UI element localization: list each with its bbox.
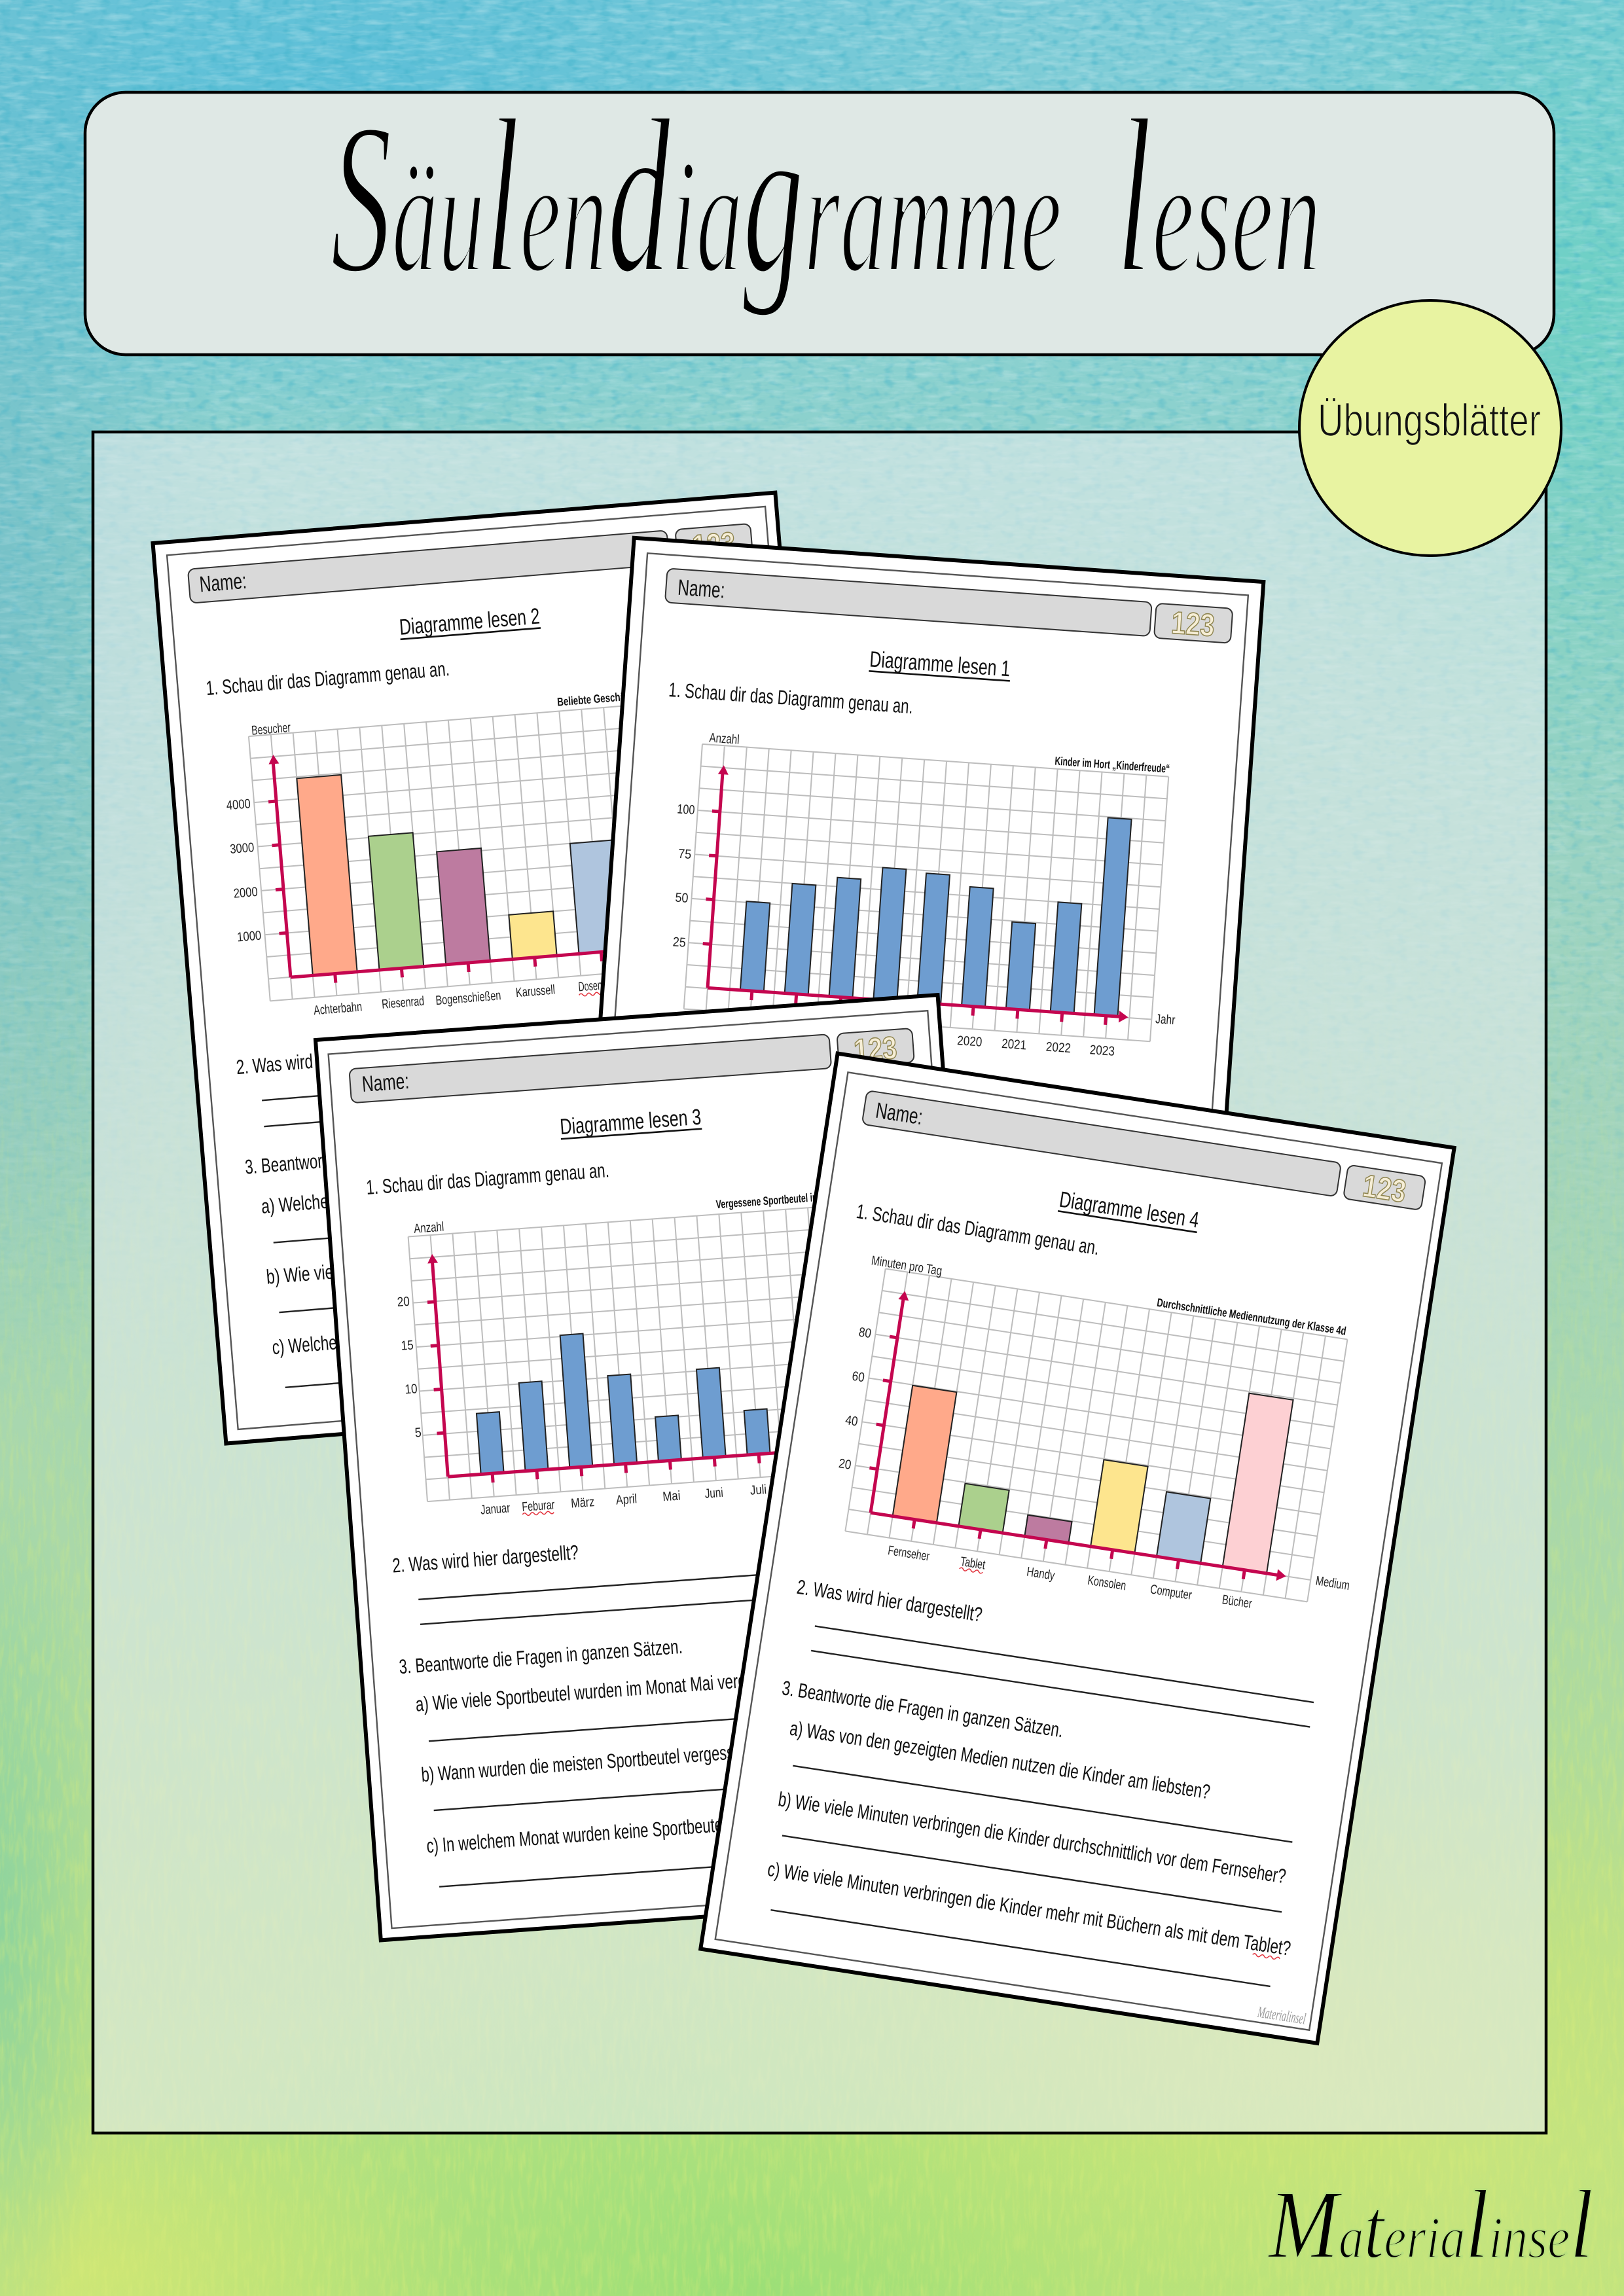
bar chart: Vergessene Sportbeutel: Mai (662, 1489, 681, 1504)
title: lesen (1116, 73, 1321, 319)
tasks 2 and 3: a) Wie viele Sportbeutel wurden im Monat Mai vergessen? (415, 1666, 794, 1716)
sheet heading (1058, 1187, 1200, 1233)
score box: 123 (1170, 605, 1216, 643)
title: Säulendiagramme (331, 73, 1062, 319)
bar chart: Kinder im Hort: 2017 (825, 1024, 851, 1041)
score box: 123 (852, 1031, 898, 1068)
tasks 2 and 3: b) Wann wurden die meisten Sportbeutel vergessen? (420, 1739, 759, 1786)
bar chart: Vergessene Sportbeutel: Juli (749, 1482, 767, 1498)
bar chart: Kinder im Hort: 2019 (914, 1031, 939, 1047)
brand: Materialinsel: Materialinsel (1267, 2170, 1593, 2279)
tasks 2 and 3: 2. Was wird hier dargestellt? (795, 1575, 984, 1626)
bar chart: Mediennutzung: 40 (844, 1413, 859, 1429)
sheet paper (700, 1054, 1454, 2043)
tasks 2 and 3 (748, 1575, 1335, 1988)
bar chart: Beliebte Geschäfte: 2000 (233, 885, 259, 901)
score box: 123 (1360, 1169, 1408, 1210)
name bar: Name: (361, 1069, 410, 1097)
bar chart: Vergessene Sportbeutel (391, 1187, 895, 1524)
sheet heading: Diagramme lesen 4 (1058, 1187, 1200, 1233)
worksheet: Diagramme lesen 3 (316, 995, 1003, 1940)
bar chart: Kinder im Hort: Kinder im Hort „Kinderfreude“ (1055, 754, 1170, 776)
task 1: 1. Schau dir das Diagramm genau an. (205, 657, 450, 700)
sheet heading: Diagramme lesen 1 (869, 647, 1011, 681)
bar chart: Kinder im Hort: Anzahl (709, 731, 740, 747)
bar chart: Mediennutzung: 80 (857, 1325, 873, 1341)
task 1: 1. Schau dir das Diagramm genau an. (365, 1158, 610, 1199)
bar chart: Vergessene Sportbeutel: 20 (397, 1295, 410, 1310)
sheet heading (399, 604, 541, 640)
bar chart: Mediennutzung: Handy (1026, 1565, 1056, 1583)
badge: Übungsblätter (1299, 300, 1561, 556)
worksheet: Diagramme lesen 2 (153, 493, 848, 1443)
name bar (862, 1090, 1341, 1196)
bar chart: Beliebte Geschäfte: 3000 (229, 840, 255, 857)
bar chart: Beliebte Geschäfte: Beliebte Geschäfte auf dem Rummel (556, 683, 709, 709)
score box: 123 (691, 526, 737, 564)
sheet heading: Diagramme lesen 2 (399, 604, 541, 640)
name bar (349, 1034, 831, 1103)
name bar: Name: (677, 575, 726, 603)
bar chart: Kinder im Hort: 2022 (1045, 1040, 1072, 1056)
bar chart: Mediennutzung (825, 1252, 1388, 1628)
tasks 2 and 3: 3. Beantworte die Fragen in ganzen Sätzen. (780, 1676, 1065, 1742)
sheet paper (571, 538, 1263, 1483)
tasks 2 and 3: 2. Was wird hier dargestellt? (391, 1541, 579, 1577)
bar chart: Vergessene Sportbeutel: April (615, 1492, 638, 1508)
tasks 2 and 3 (391, 1516, 943, 1888)
bar chart: Kinder im Hort: 2018 (870, 1028, 895, 1043)
worksheet: Diagramme lesen 4 (700, 1054, 1454, 2043)
bar chart: Beliebte Geschäfte: 4000 (226, 797, 251, 813)
bar chart: Mediennutzung: Bücher (1221, 1592, 1254, 1611)
sheet paper (153, 493, 848, 1443)
bar chart: Kinder im Hort: 2015 (736, 1018, 763, 1034)
watermark: Materialinsel (1256, 2004, 1307, 2028)
tasks 2 and 3: c) In welchem Monat wurden keine Sportbeutel vergessen? (425, 1807, 804, 1857)
bar chart: Beliebte Geschäfte (220, 683, 738, 1024)
bar chart: Mediennutzung: 20 (838, 1456, 852, 1473)
bar chart: Mediennutzung: Tablet (960, 1554, 986, 1573)
bar chart: Vergessene Sportbeutel: Anzahl (414, 1220, 444, 1236)
bar chart: Vergessene Sportbeutel: Feburar (522, 1498, 555, 1515)
bar chart: Beliebte Geschäfte: Achterbahn (313, 999, 363, 1018)
bar chart: Kinder im Hort: 2023 (1089, 1043, 1115, 1059)
bar chart: Vergessene Sportbeutel: Juni (704, 1486, 723, 1501)
name bar (188, 530, 670, 603)
tasks 2 and 3: 3. Beantworte die Fragen in ganzen Sätzen. (244, 1133, 529, 1179)
bar chart: Beliebte Geschäfte: Karussell (515, 982, 556, 1000)
score box (1154, 603, 1233, 645)
bar chart: Vergessene Sportbeutel: 10 (405, 1382, 418, 1397)
bar chart: Beliebte Geschäfte: Riesenrad (381, 994, 425, 1012)
worksheet: Diagramme lesen 1 (571, 538, 1263, 1483)
tasks 2 and 3 (235, 1013, 788, 1390)
bar chart: Kinder im Hort: 2016 (781, 1021, 807, 1037)
bar chart: Kinder im Hort: 25 (672, 935, 686, 950)
bar chart: Mediennutzung: 60 (851, 1369, 865, 1385)
tasks 2 and 3: a) Welches Geschäft hatte die meisten Besucher? (261, 1168, 595, 1218)
sheet heading: Diagramme lesen 3 (559, 1105, 702, 1139)
bar chart: Kinder im Hort (662, 728, 1193, 1063)
bar chart: Mediennutzung: Minuten pro Tag (871, 1253, 943, 1278)
score box (837, 1028, 914, 1069)
bar chart: Kinder im Hort: 75 (677, 847, 692, 862)
bar chart: Vergessene Sportbeutel: März (571, 1495, 595, 1511)
tasks 2 and 3: a) Was von den gezeigten Medien nutzen die Kinder am liebsten? (788, 1717, 1212, 1803)
tasks 2 and 3: c) Wie viele Minuten verbringen die Kinder mehr mit Büchern als mit dem Tablet? (766, 1857, 1292, 1960)
bar chart: Kinder im Hort: Jahr (1155, 1012, 1176, 1028)
bar chart: Kinder im Hort: 2021 (1001, 1037, 1027, 1052)
task 1: 1. Schau dir das Diagramm genau an. (668, 678, 914, 718)
bar chart: Beliebte Geschäfte: Besucher (251, 721, 291, 738)
bar chart: Vergessene Sportbeutel: 15 (401, 1338, 414, 1354)
bar chart: Mediennutzung: Konsolen (1087, 1573, 1127, 1593)
bar chart: Vergessene Sportbeutel: Vergessene Sportbeutel im Jahr 2023 (715, 1188, 859, 1211)
name bar: Name: (874, 1098, 924, 1130)
tasks 2 and 3: 3. Beantworte die Fragen in ganzen Sätzen. (398, 1635, 683, 1678)
bar chart: Vergessene Sportbeutel: Januar (480, 1501, 511, 1518)
sheet heading (559, 1105, 702, 1139)
bar chart: Beliebte Geschäfte: 1000 (236, 929, 262, 945)
bar chart: Mediennutzung: Medium (1314, 1573, 1350, 1593)
sheet heading (869, 647, 1011, 681)
tasks 2 and 3: 2. Was wird hier dargestellt? (235, 1041, 423, 1079)
name bar (665, 568, 1152, 636)
tasks 2 and 3: b) Wie viele Besucher hatte das Karussell? (266, 1242, 554, 1289)
sheet paper (316, 995, 1003, 1940)
bar chart: Mediennutzung: Durchschnittliche Mediennutzung der Klasse 4d (1156, 1296, 1347, 1338)
bar chart: Mediennutzung: Fernseher (887, 1543, 931, 1564)
score box (675, 524, 753, 565)
bar chart: Kinder im Hort: 2020 (957, 1033, 983, 1050)
tasks 2 and 3: b) Wie viele Minuten verbringen die Kinder durchschnittlich vor dem Fernseher? (777, 1787, 1288, 1888)
bar chart: Kinder im Hort: 50 (675, 891, 689, 906)
badge: Übungsblätter: Übungsblätter (1318, 395, 1541, 446)
title panel (85, 92, 1554, 355)
panel: worksheets frame (93, 432, 1546, 2133)
score box (1343, 1165, 1426, 1212)
bar chart: Beliebte Geschäfte: Dosenwerfen (578, 977, 627, 994)
bar chart: Beliebte Geschäfte: Bogenschießen (435, 988, 501, 1008)
bar chart: Vergessene Sportbeutel: 5 (414, 1426, 422, 1441)
name bar: Name: (198, 569, 247, 597)
bar chart: Kinder im Hort: 100 (677, 802, 695, 817)
task 1: 1. Schau dir das Diagramm genau an. (855, 1200, 1101, 1259)
tasks 2 and 3: c) Welches Geschäft hatte am wenigsten Besucher? (271, 1308, 612, 1359)
bar chart: Mediennutzung: Computer (1149, 1582, 1193, 1603)
